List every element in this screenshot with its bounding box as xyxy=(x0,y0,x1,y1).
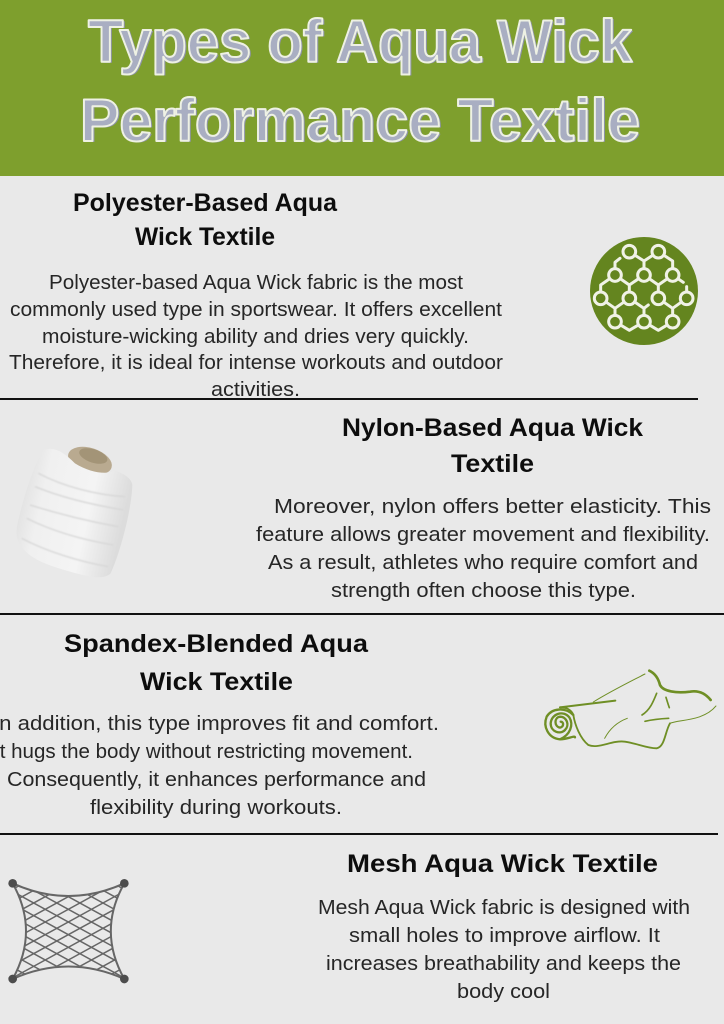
text block: spandex description: Consequently, it enhances performance and xyxy=(7,769,426,791)
title: line two: Performance Textile xyxy=(80,87,640,154)
text block: spandex description xyxy=(0,713,439,819)
text block: nylon description xyxy=(256,496,711,602)
icon: molecular lattice xyxy=(590,237,698,345)
text block: mesh description xyxy=(318,897,690,1003)
panel: nylon-based xyxy=(17,414,711,602)
title banner xyxy=(0,0,724,176)
heading: polyester: Polyester-Based Aqua xyxy=(73,189,338,217)
heading: spandex xyxy=(64,630,369,696)
icon: stretched net xyxy=(8,879,129,984)
text block: mesh description: increases breathability and keeps the xyxy=(326,953,681,975)
panel: polyester-based xyxy=(9,189,698,401)
text block: mesh description: small holes to improve airflow. It xyxy=(349,925,660,947)
title: line one: Types of Aqua Wick xyxy=(88,8,633,75)
heading: spandex: Spandex-Blended Aqua xyxy=(64,630,369,658)
heading: nylon: Nylon-Based Aqua Wick xyxy=(342,414,643,442)
panel: mesh xyxy=(8,854,689,1002)
text block: mesh description: body cool xyxy=(457,981,550,1003)
panel: spandex-blended xyxy=(0,630,716,819)
text block: nylon description: As a result, athletes who require comfort and xyxy=(268,552,698,574)
text block: polyester description: Polyester-based Aqua Wick fabric is the most xyxy=(49,272,463,294)
heading: spandex: Wick Textile xyxy=(140,668,293,696)
text block: spandex description: In addition, this type improves fit and comfort. xyxy=(0,713,439,735)
text block: polyester description: activities. xyxy=(211,379,300,401)
text block: nylon description: strength often choose this type. xyxy=(331,580,636,602)
heading: nylon: Textile xyxy=(451,450,534,478)
text block: nylon description: Moreover, nylon offers better elasticity. This xyxy=(274,496,711,518)
text block: spandex description: It hugs the body without restricting movement. xyxy=(0,741,413,763)
text block: polyester description xyxy=(9,272,503,401)
text block: polyester description: Therefore, it is ideal for intense workouts and outdoor xyxy=(9,352,503,374)
title: line one: Types of Aqua Wick xyxy=(90,9,635,76)
text block: mesh description: Mesh Aqua Wick fabric is designed with xyxy=(318,897,690,919)
title: line two: Performance Textile xyxy=(82,88,642,155)
text block: spandex description: flexibility during workouts. xyxy=(90,797,342,819)
icon: rolled fabric xyxy=(545,671,716,748)
heading: nylon xyxy=(342,414,643,478)
heading: polyester: Wick Textile xyxy=(135,223,275,251)
heading: polyester xyxy=(73,189,338,251)
icon: white yarn spool xyxy=(17,442,132,577)
heading: mesh: Mesh Aqua Wick Textile xyxy=(347,850,658,878)
text block: nylon description: feature allows greater movement and flexibility. xyxy=(256,524,710,546)
text block: polyester description: commonly used type in sportswear. It offers excellent xyxy=(10,299,502,321)
text block: polyester description: moisture-wicking ability and dries very quickly. xyxy=(42,326,469,348)
